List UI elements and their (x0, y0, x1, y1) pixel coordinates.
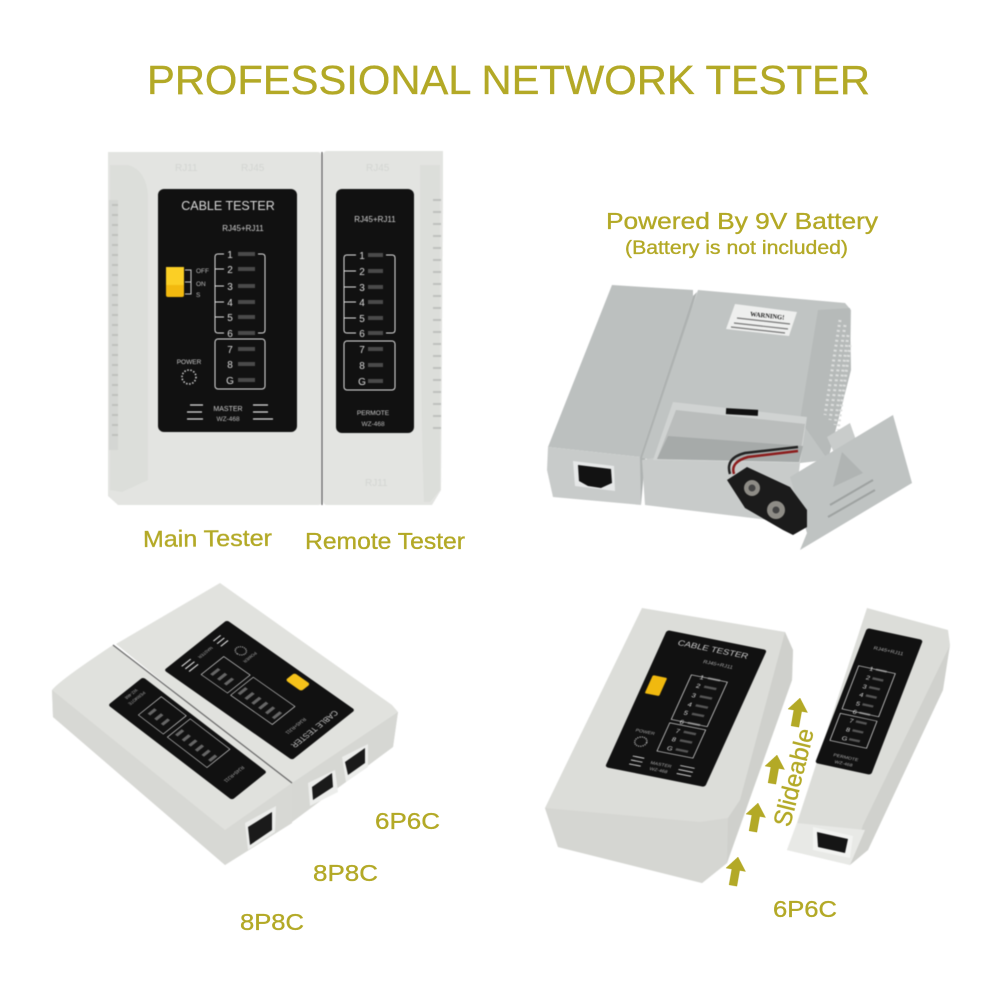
remote tester black panel: G (358, 377, 366, 388)
remote tester black panel: 1 (868, 666, 875, 673)
label: main tester: Main Tester (143, 525, 272, 552)
panel: slideable view (545, 608, 950, 883)
RJ45 port 8P8C (245, 806, 276, 850)
remote tester black panel (108, 677, 267, 800)
main tester body: RJ11 (175, 163, 198, 174)
main tester black panel: G (666, 746, 674, 753)
main tester black panel: CABLE TESTER (181, 199, 275, 213)
remote tester body: RJ45 (366, 163, 390, 174)
main tester black panel: S (196, 292, 201, 299)
open battery cover (790, 415, 912, 550)
remote tester black panel (336, 189, 414, 433)
remote tester black panel: PERMOTE (833, 753, 859, 762)
slide switch (166, 267, 191, 297)
main tester black panel: 2 (227, 265, 233, 276)
arrow: slide 1 (785, 696, 810, 728)
battery compartment (653, 402, 807, 463)
label: 6P6C right: 6P6C (773, 896, 837, 922)
main tester black panel: WZ-468 (648, 766, 669, 775)
main tester black panel: 1 (227, 250, 233, 261)
main tester black panel: RJ45+RJ11 (222, 224, 264, 233)
main tester black panel: MASTER (197, 646, 214, 659)
main tester black panel: 1 (698, 675, 705, 681)
remote tester black panel: WZ-468 (123, 688, 139, 700)
title: PROFESSIONAL NETWORK TESTER (147, 57, 870, 103)
remote tester black panel: 6 (852, 709, 858, 716)
panel: battery compartment view (547, 285, 912, 550)
main tester black panel: 3 (227, 282, 233, 293)
remote tester black panel (815, 628, 923, 775)
remote tester black panel: 2 (865, 675, 871, 682)
remote tester black panel: 3 (359, 283, 365, 294)
remote tester black panel: PERMOTE (127, 691, 147, 706)
icon: power LED (182, 370, 196, 384)
remote tester black panel: 3 (861, 684, 868, 691)
main tester black panel (158, 189, 297, 432)
remote tester black panel: RJ45+RJ11 (354, 215, 396, 224)
label: remote tester: Remote Tester (305, 528, 465, 554)
remote tester black panel: 2 (359, 267, 365, 278)
panel: front view of main and remote testers (108, 151, 443, 505)
remote tester black panel: 8 (359, 361, 365, 372)
main tester black panel: POWER (634, 728, 656, 737)
left module (547, 285, 697, 505)
remote tester body (323, 151, 443, 505)
main tester black panel: 2 (695, 683, 701, 690)
remote tester body: RJ11 (365, 478, 388, 489)
label: slideable: Slideable (769, 726, 820, 829)
panel: angled view with ports (52, 583, 398, 865)
remote tester black panel: 8 (845, 727, 851, 734)
main module with open compartment (642, 290, 851, 523)
remote tester black panel: 1 (359, 251, 365, 262)
main tester body: RJ45 (241, 163, 265, 174)
main tester black panel: CABLE TESTER (676, 638, 750, 661)
main tester body (545, 608, 793, 883)
main tester black panel: 4 (686, 702, 693, 708)
main tester black panel: 7 (227, 345, 233, 356)
remote tester black panel: RJ45+RJ11 (872, 646, 904, 657)
main tester black panel: 8 (227, 360, 233, 371)
arrow: slide 3 (743, 801, 768, 833)
remote tester black panel: 5 (855, 701, 861, 708)
main tester black panel (164, 620, 355, 760)
main tester black panel: OFF (196, 268, 209, 275)
main tester black panel: POWER (242, 651, 258, 664)
main tester black panel: WZ-468 (216, 416, 240, 423)
arrow: slide 2 (762, 753, 787, 785)
remote tester black panel: 7 (359, 345, 365, 356)
heading: battery: Powered By 9V Battery (606, 208, 879, 234)
remote tester black panel: RJ45+RJ11 (222, 764, 245, 783)
label: 8P8C lower: 8P8C (240, 909, 304, 935)
main tester black panel (605, 630, 767, 787)
remote tester black panel: PERMOTE (357, 410, 390, 417)
main tester black panel: RJ45+RJ11 (702, 660, 734, 671)
note: battery not included: (Battery is not included) (625, 238, 848, 259)
main tester black panel: G (226, 376, 234, 387)
main tester black panel: 4 (227, 298, 233, 309)
label: 6P6C: 6P6C (375, 808, 440, 834)
battery clip (727, 447, 807, 535)
main tester black panel: MASTER (213, 406, 243, 413)
remote tester black panel: 5 (359, 314, 365, 325)
main tester body (116, 583, 398, 822)
main tester black panel: ON (196, 281, 206, 288)
arrow: slide 4 (723, 855, 748, 887)
main tester black panel: 5 (227, 313, 233, 324)
warning label: WARNING! (750, 311, 785, 322)
remote tester black panel: WZ-468 (834, 760, 854, 768)
remote tester black panel: WZ-468 (361, 421, 385, 428)
main tester black panel: MASTER (649, 760, 673, 770)
RJ45 port (813, 827, 853, 858)
main tester black panel: 6 (678, 719, 685, 726)
RJ45 port (573, 461, 615, 491)
main tester black panel: POWER (177, 359, 202, 366)
warning label (726, 304, 797, 336)
seam between testers (321, 152, 323, 505)
main tester black panel: RJ45+RJ11 (283, 716, 307, 735)
main tester black panel: 3 (690, 693, 697, 699)
main tester black panel: 7 (674, 728, 681, 735)
main tester black panel: CABLE TESTER (288, 709, 340, 749)
main tester black panel: 8 (670, 737, 677, 743)
main tester black panel: 6 (227, 329, 233, 340)
remote tester black panel: 6 (359, 329, 365, 340)
remote tester black panel: G (840, 736, 848, 743)
RJ45 ports 8P8C and 6P6C (308, 744, 368, 806)
remote tester black panel: 4 (359, 298, 365, 309)
label: 8P8C upper: 8P8C (313, 860, 378, 886)
remote tester black panel: 4 (858, 692, 865, 699)
remote tester body (787, 608, 950, 865)
remote tester black panel: 7 (848, 718, 855, 725)
main tester body (108, 152, 321, 505)
main tester black panel: 5 (682, 710, 689, 717)
remote tester body (52, 645, 292, 865)
